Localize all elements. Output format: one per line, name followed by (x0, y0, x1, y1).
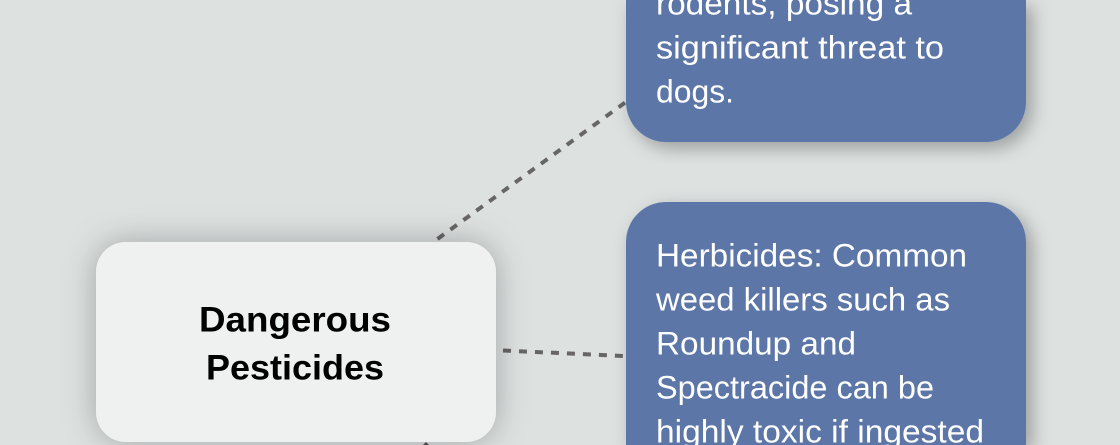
heading: dangerous pesticides: Pesticides (206, 348, 384, 388)
connector: center to herbicides panel (503, 350, 624, 356)
connector: center to lower panel (423, 442, 429, 445)
text: herbicides description: Spectracide can be (656, 370, 934, 406)
text: herbicides description: weed killers such as (655, 282, 950, 318)
text: rodenticides description: significant threat to (656, 30, 944, 66)
text: herbicides description: Roundup and (656, 326, 856, 362)
panel: central topic (96, 242, 496, 442)
heading: dangerous pesticides: Dangerous (199, 300, 391, 340)
connector: center to top panel (438, 103, 625, 239)
text: herbicides description (655, 238, 984, 445)
panel: rodenticides (626, 0, 1026, 142)
panel: herbicides (626, 202, 1026, 445)
heading: dangerous pesticides (199, 300, 391, 388)
text: rodenticides description (656, 0, 944, 110)
text: rodenticides description: dogs. (656, 74, 734, 110)
text: herbicides description: Herbicides: Common (656, 238, 967, 274)
